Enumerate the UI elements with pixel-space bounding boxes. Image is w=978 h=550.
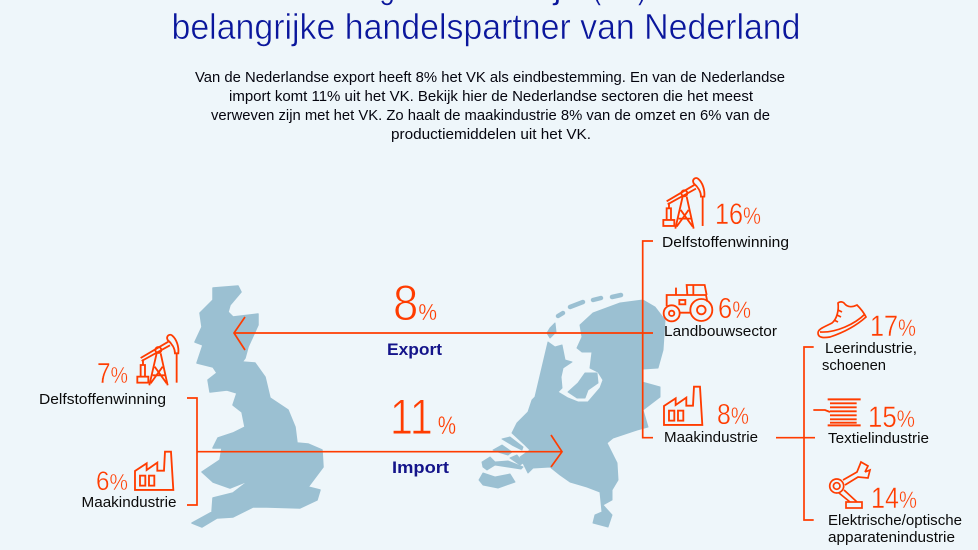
NL: manufacturing (664, 387, 758, 446)
NL: mining: 16% (715, 198, 761, 231)
icon: oil pump (663, 178, 704, 229)
icon: thread spool (813, 399, 861, 425)
import arrow (197, 435, 562, 467)
intro text: Van de Nederlandse export heeft 8% het VK als eindbestemming. En van de Nederlandse (195, 69, 785, 86)
UK: mining (39, 335, 178, 408)
map: United Kingdom (192, 286, 323, 527)
icon: robot arm (830, 462, 870, 508)
intro text (195, 69, 785, 143)
sub-sector: electrical and optical equipment: apparatenindustrie (828, 529, 955, 546)
NL: agriculture (664, 285, 777, 340)
sub-sector: leather and shoes: schoenen (822, 357, 886, 374)
import label: Import (392, 458, 449, 477)
sub-sector: electrical and optical equipment (828, 462, 962, 546)
NL: manufacturing: 8% (717, 399, 749, 431)
NL: mining (662, 178, 789, 251)
UK: manufacturing: Maakindustrie (82, 494, 176, 511)
export figure: 8% (393, 275, 437, 331)
sub-sector: leather and shoes: 17% (870, 310, 916, 343)
NL: agriculture: 6% (718, 293, 751, 325)
bracket: UK sectors (187, 398, 197, 505)
icon: factory (664, 387, 702, 425)
NL: mining: Delfstoffenwinning (662, 234, 789, 251)
sub-sector: leather and shoes (818, 302, 917, 374)
intro text: productiemiddelen uit het VK. (391, 126, 591, 143)
icon: shoe (818, 302, 866, 338)
icon: oil pump (137, 335, 178, 385)
sub-sector: textiles: Textielindustrie (828, 430, 929, 447)
export arrow (234, 317, 653, 350)
intro text: verweven zijn met het VK. Zo haalt de maakindustrie 8% van de omzet en 6% van de (211, 107, 770, 124)
sub-sector: electrical and optical equipment: 14% (871, 482, 917, 515)
sub-sector: leather and shoes: Leerindustrie, (825, 340, 917, 357)
bracket: NL sectors (643, 241, 653, 438)
icon: tractor (664, 285, 712, 321)
UK: mining: 7% (97, 358, 128, 390)
Wadden islands (558, 295, 621, 316)
UK: mining: Delfstoffenwinning (39, 391, 166, 408)
connector: manufacturing sub-sectors (776, 347, 815, 520)
map: Netherlands (479, 300, 665, 527)
intro text: import komt 11% uit het VK. Bekijk hier de Nederlandse sectoren die het meest (229, 88, 754, 105)
export label: Export (387, 340, 442, 359)
icon: factory (135, 452, 173, 490)
UK: manufacturing (82, 452, 176, 511)
sub-sector: electrical and optical equipment: Elektrische/optische (828, 512, 962, 529)
UK: manufacturing: 6% (96, 466, 128, 496)
NL: manufacturing: Maakindustrie (664, 429, 758, 446)
sub-sector: textiles: 15% (868, 401, 915, 434)
title: belangrijke handelspartner van Nederland (172, 6, 800, 47)
import figure: 11% (390, 389, 456, 445)
NL: agriculture: Landbouwsector (664, 323, 777, 340)
sub-sector: textiles (813, 399, 929, 447)
